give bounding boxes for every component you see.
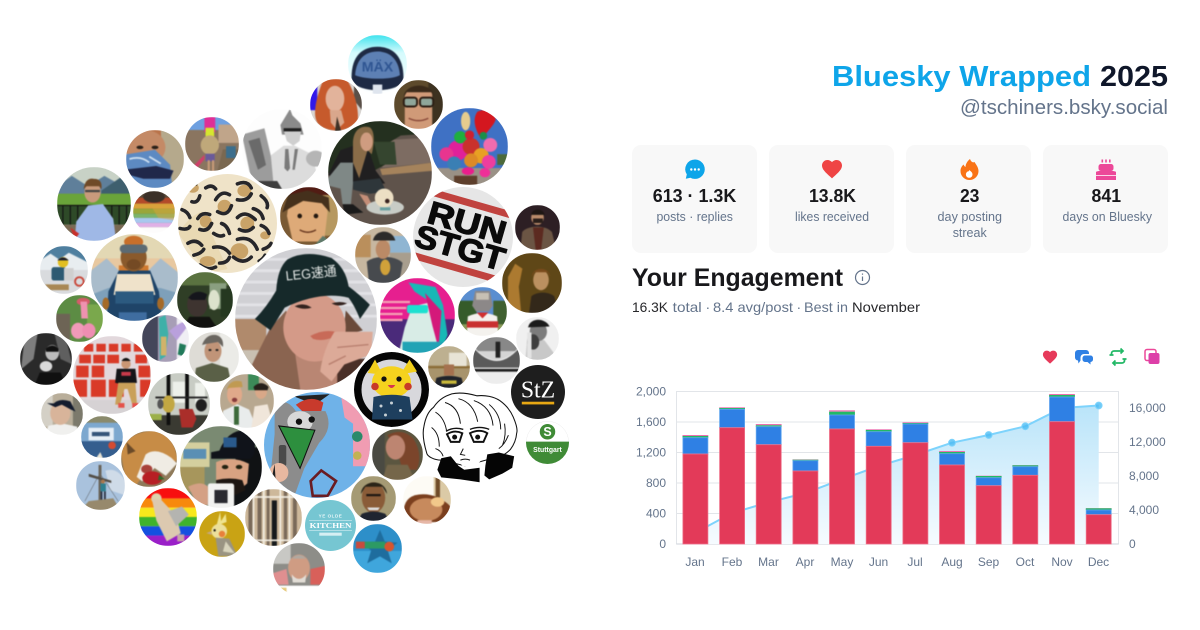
avatar: StZ logo — [511, 365, 565, 419]
stat card: streak: day posting — [938, 209, 1002, 224]
avatar: S-Bahn Stuttgart logo: S — [543, 425, 551, 439]
stacked bars — [682, 394, 1112, 544]
avatar: man smoking, black and white — [516, 317, 559, 360]
avatar: pink flamingo — [56, 295, 103, 342]
month labels: Oct — [1016, 555, 1035, 569]
left axis labels: 0 — [659, 537, 666, 551]
month labels: Sep — [978, 555, 999, 569]
cumulative area — [695, 406, 1099, 544]
avatar: man in dark cap — [41, 393, 83, 435]
icon: chat bubble — [685, 159, 705, 179]
avatar: S-Bahn Stuttgart logo — [526, 421, 569, 464]
icon: info — [856, 270, 870, 284]
engagement summary: 8.4 avg/post — [713, 299, 793, 315]
stat card: likes — [769, 145, 894, 253]
month labels: Feb — [722, 555, 743, 569]
avatar: rainbow scarf — [133, 191, 175, 228]
stat card: days on Bluesky: 841 — [1092, 186, 1121, 206]
avatar: man with silver trophy, greyscale — [242, 110, 322, 189]
avatar: skate bowl, black and white — [473, 337, 520, 384]
stat card: posts and replies: posts · replies — [656, 209, 733, 224]
right axis labels: 0 — [1129, 537, 1136, 551]
avatar: bearded man portrait — [515, 205, 560, 250]
month labels: Jul — [907, 555, 923, 569]
left axis labels: 2,000 — [636, 384, 666, 398]
cumulative line — [695, 406, 1099, 533]
avatar: blue dome sign: MÄX — [361, 58, 393, 75]
avatar: woman with white dog — [328, 121, 432, 225]
avatar: Ye Olde Kitchen logo: YE OLDE — [318, 513, 342, 518]
avatar: blue tiles poster — [81, 416, 123, 458]
avatar: smiling older man — [273, 543, 325, 592]
avatar: leopard print — [178, 174, 277, 273]
avatar: RUN STGT shirt: RUN — [424, 194, 511, 251]
icon: likes heart — [1043, 351, 1057, 364]
stat card: streak: streak — [953, 225, 987, 240]
avatar: RUN STGT shirt — [413, 187, 513, 287]
chart legend icons — [1043, 348, 1160, 366]
avatar: RUN STGT shirt: STGT — [413, 218, 510, 278]
left axis labels: 1,600 — [636, 415, 666, 429]
avatar: cartoon man with glasses — [394, 80, 443, 129]
avatar: man in dark foliage — [177, 272, 233, 328]
left axis labels: 1,200 — [636, 446, 666, 460]
combo chart: monthly engagement — [636, 384, 1166, 569]
title: 2025 — [1100, 61, 1168, 93]
month labels: Jun — [869, 555, 888, 569]
icon: quotes copy — [1145, 350, 1160, 364]
avatar: man in grey sweater — [189, 332, 239, 382]
engagement summary: total — [673, 299, 702, 315]
avatar: man in cap drinking from mug — [180, 426, 262, 508]
right column: stats and chart — [620, 0, 1200, 630]
left axis labels: 800 — [646, 476, 666, 490]
month labels: May — [831, 555, 853, 569]
engagement summary: · — [706, 299, 710, 315]
avatar: Ye Olde Kitchen logo — [305, 500, 356, 551]
avatar: graffiti mouse with gun — [264, 392, 370, 498]
avatar: person with pink poster in park — [185, 117, 239, 171]
avatar: blue dome sign — [348, 35, 407, 94]
month labels: Dec — [1088, 555, 1109, 569]
title: Bluesky Wrapped — [832, 61, 1091, 93]
avatar: capybara in ski jacket — [91, 234, 178, 321]
stat card: streak — [906, 145, 1031, 253]
engagement summary — [632, 299, 920, 315]
avatar: dark haired man portrait — [351, 476, 396, 521]
stat card: likes: likes received — [795, 209, 869, 224]
avatar: balloon bunch — [431, 108, 508, 185]
stat card: days on Bluesky — [1043, 145, 1168, 253]
left axis labels: 400 — [646, 506, 666, 520]
avatar: red haired woman — [310, 79, 362, 131]
right axis labels: 16,000 — [1129, 401, 1166, 415]
right axis labels: 8,000 — [1129, 469, 1159, 483]
avatar: cockatiel on rainbow — [139, 488, 197, 546]
avatar: StZ logo: StZ — [521, 377, 555, 403]
avatar: lego figure in mountains — [40, 246, 88, 294]
avatar: neon unicorn — [380, 278, 455, 353]
avatar: person with blue scarf — [126, 130, 184, 188]
avatar: guitar with hand — [142, 314, 188, 362]
avatar: squat rack gym — [148, 373, 210, 435]
avatar: fox eating strawberry — [121, 431, 177, 487]
stat card: days on Bluesky: days on Bluesky — [1063, 209, 1153, 224]
avatar: man in grey t-shirt — [355, 227, 411, 283]
engagement summary: November — [852, 299, 920, 315]
engagement summary: · — [796, 299, 801, 315]
line markers — [949, 402, 1102, 446]
icon: flame — [960, 159, 978, 180]
month labels: Aug — [941, 555, 963, 569]
icon: birthday cake — [1096, 160, 1116, 180]
avatar bubble cloud — [20, 35, 569, 592]
left axis labels — [636, 384, 666, 551]
stat card: streak: 23 — [960, 186, 979, 206]
month labels: Mar — [758, 555, 779, 569]
avatar: Pikachu plush — [354, 352, 429, 427]
avatar: woman in black bucket hat: LEG速通 — [285, 263, 338, 284]
month labels: Nov — [1051, 555, 1073, 569]
avatar: man in blue shirt on balcony — [57, 167, 131, 241]
stat card: likes: 13.8K — [809, 186, 856, 206]
avatar: ink manga drawing — [422, 392, 518, 482]
heading: Your Engagement: Your Engagement — [632, 264, 844, 292]
avatar: man with giraffe painting — [502, 253, 562, 313]
avatar: Ye Olde Kitchen logo: KITCHEN — [309, 521, 352, 530]
icon: reposts arrows — [1110, 348, 1126, 366]
month labels — [685, 555, 1109, 569]
avatar: woman in black bucket hat — [235, 248, 377, 390]
engagement summary: Best in — [804, 299, 848, 315]
month labels: Jan — [685, 555, 705, 569]
avatar: blurred face in warm light — [404, 476, 451, 524]
avatar: blue star game art — [353, 524, 402, 573]
right axis labels: 12,000 — [1129, 435, 1166, 449]
avatar: S-Bahn Stuttgart logo: Stuttgart — [533, 446, 562, 453]
right axis labels: 4,000 — [1129, 503, 1159, 517]
avatar: cockatiel on gold — [199, 511, 245, 557]
avatar: summit cross — [76, 460, 124, 510]
right axis labels — [1129, 401, 1166, 551]
avatar: anime style man — [280, 187, 338, 245]
avatar: woman with curly red hair — [372, 429, 423, 480]
avatar: two shouting men in shirts — [220, 374, 274, 428]
avatar: dog in VfB shirt — [458, 287, 507, 336]
avatar: man in yellow logo shirt — [428, 346, 470, 388]
icon: heart — [822, 160, 842, 178]
avatar: man on red stadium seats — [73, 336, 151, 414]
stat card: posts and replies — [632, 145, 757, 253]
stat card: posts and replies: 613 · 1.3K — [653, 186, 736, 206]
month labels: Apr — [796, 555, 814, 569]
engagement summary: 16.3K — [632, 299, 669, 315]
avatar: man, black and white dark — [20, 333, 72, 385]
icon: replies bubbles — [1075, 350, 1093, 364]
handle: @tschiners.bsky.social — [960, 97, 1168, 119]
avatar: wooden beads curtain — [244, 488, 302, 546]
